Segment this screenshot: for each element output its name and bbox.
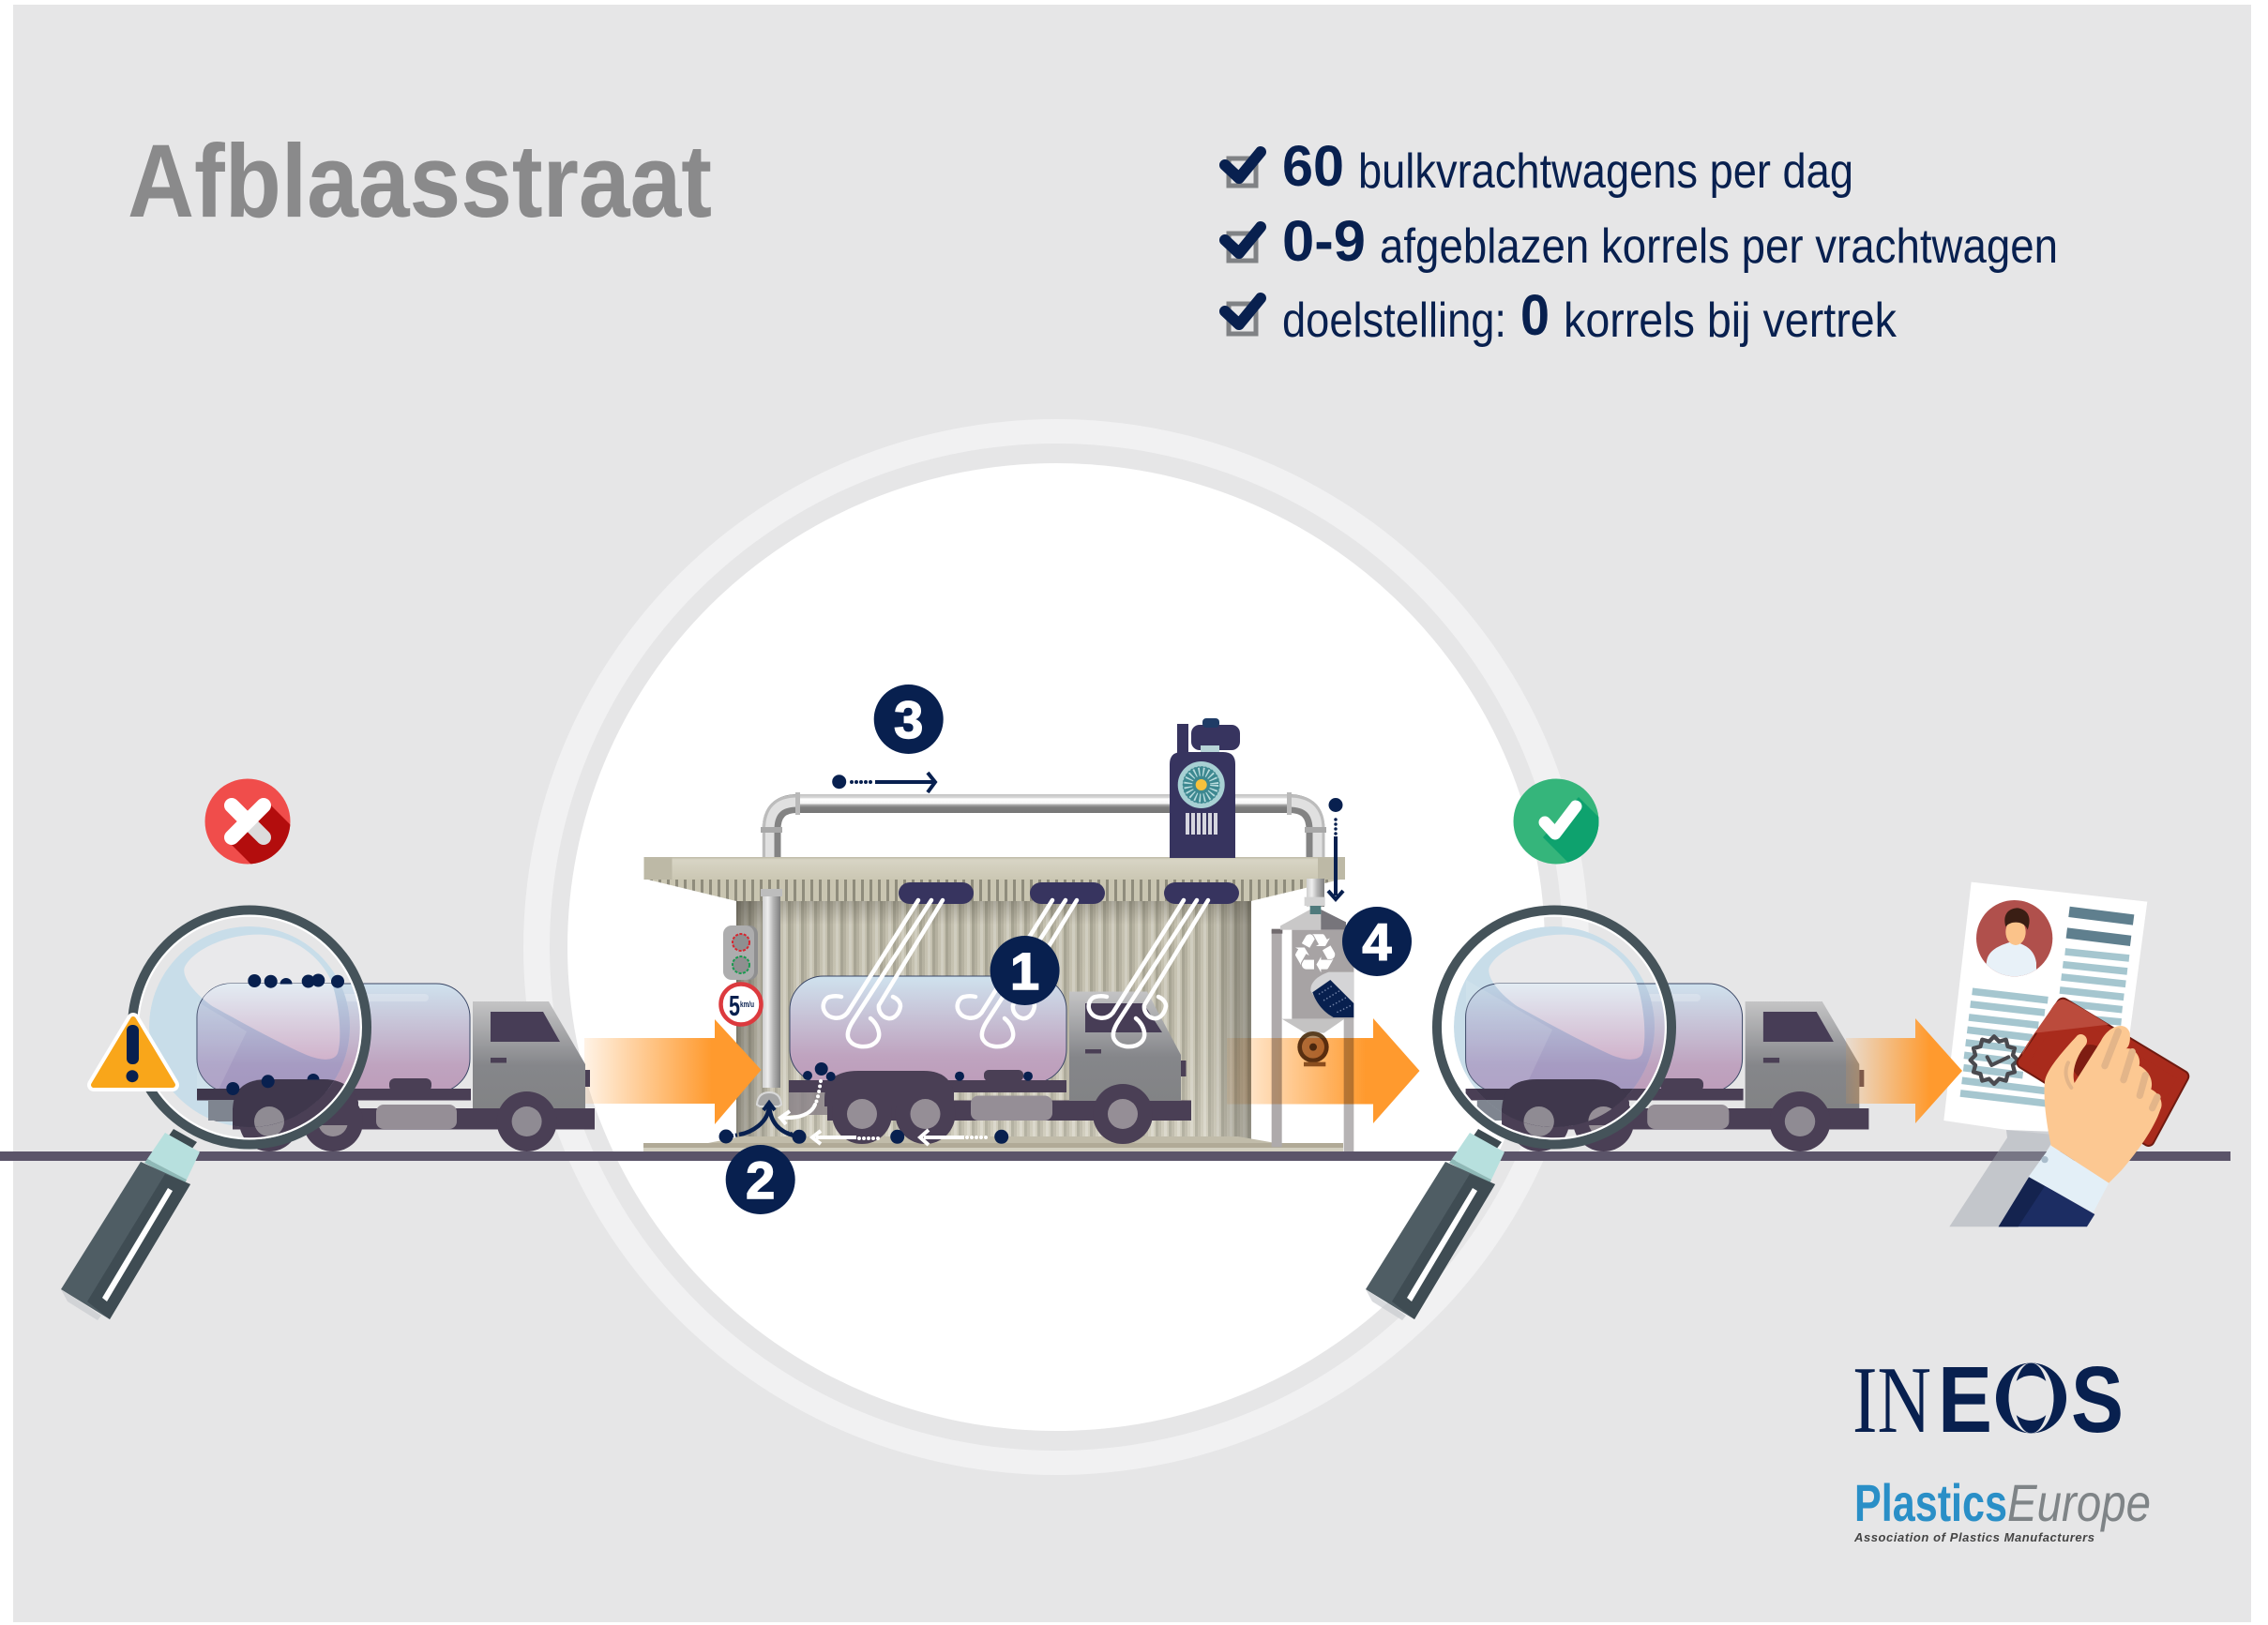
arrow: truck leaves shed bbox=[1227, 1018, 1420, 1123]
checklist row 1: bulkvrachtwagens per dag bbox=[1358, 144, 1853, 199]
speed limit sign bbox=[720, 985, 762, 1024]
magnifier lens bbox=[128, 906, 371, 1150]
hand with cuff and sleeve bbox=[1999, 1026, 2162, 1226]
title: Afblaasstraat bbox=[128, 124, 712, 239]
panel: truck after cleaning under magnifier bbox=[1366, 910, 1868, 1320]
icon: fan unit with motor bbox=[1170, 718, 1240, 858]
magnifier handle bbox=[61, 1129, 200, 1320]
checklist row 1 bbox=[1225, 134, 1853, 199]
traffic light bbox=[723, 925, 758, 980]
logo: PlasticsEurope: Europe bbox=[2007, 1473, 2151, 1532]
INEOS letter O bbox=[1996, 1363, 2066, 1433]
truck before bbox=[197, 984, 595, 1151]
logo: INEOS bbox=[1852, 1347, 2124, 1453]
plastic pellets on truck bbox=[226, 973, 344, 1095]
checklist row 1: 60 bbox=[1282, 134, 1344, 198]
compressed air streams bbox=[824, 900, 1208, 1046]
panel: approved document with stamp bbox=[1943, 882, 2183, 1226]
checklist row 3 bbox=[1225, 283, 1898, 348]
ceiling air nozzles bbox=[899, 882, 1239, 904]
step number 3 bbox=[874, 685, 944, 754]
icon: red cross bbox=[204, 778, 291, 865]
arrow: truck enters shed bbox=[584, 1019, 762, 1124]
checklist row 2 bbox=[1225, 209, 2058, 274]
logo: INEOS: E bbox=[1938, 1347, 1992, 1452]
step number 3: 3 bbox=[894, 690, 923, 749]
logo: PlasticsEurope: Association of Plastics Manufacturers bbox=[1853, 1530, 2094, 1544]
step number 1 bbox=[990, 936, 1060, 1005]
checklist row 3: 0 bbox=[1520, 283, 1550, 347]
panel: blow-off shed bbox=[643, 857, 1345, 1152]
logo: INEOS: IN bbox=[1852, 1347, 1931, 1453]
checklist row 3: doelstelling: bbox=[1282, 293, 1506, 348]
icon: warning triangle bbox=[94, 1019, 173, 1085]
checklist row 2: 0-9 bbox=[1282, 209, 1366, 273]
recycling filter unit bbox=[1272, 897, 1353, 1151]
hand shadow bbox=[1949, 1100, 2052, 1226]
logo: PlasticsEurope bbox=[1853, 1473, 2151, 1544]
document sheet bbox=[1943, 882, 2147, 1132]
shed roof bbox=[643, 857, 1345, 901]
speed limit sign: 5 bbox=[729, 989, 740, 1022]
logo: INEOS: S bbox=[2071, 1347, 2124, 1452]
step number 1: 1 bbox=[1010, 941, 1039, 1001]
document text bars bbox=[1960, 911, 2134, 1104]
panel: truck before cleaning under magnifier bbox=[61, 910, 595, 1320]
road line bbox=[0, 1151, 2230, 1161]
arrow: exhaust down to filter bbox=[1328, 798, 1343, 899]
checklist row 2: afgeblazen korrels per vrachtwagen bbox=[1380, 219, 2058, 274]
icon: green check bbox=[1514, 778, 1598, 865]
step number 4: 4 bbox=[1362, 912, 1392, 971]
red stamp bbox=[2022, 1000, 2183, 1140]
checklist row 3: korrels bij vertrek bbox=[1564, 293, 1898, 348]
checklist of key figures bbox=[1225, 134, 2058, 348]
particle route on floor and suction inlet bbox=[718, 1062, 1033, 1145]
magnifier lens bbox=[1432, 906, 1676, 1150]
magnifier handle bbox=[1366, 1129, 1504, 1320]
shed floor bbox=[643, 1136, 1343, 1152]
truck after bbox=[1466, 984, 1868, 1151]
logo: PlasticsEurope: Plastics bbox=[1854, 1473, 2007, 1532]
panel: central spotlight circle bbox=[523, 419, 1589, 1475]
truck in shed bbox=[789, 976, 1191, 1144]
top extraction pipe bbox=[761, 792, 1326, 907]
speed limit sign: km/u bbox=[740, 1000, 754, 1009]
step number 2 bbox=[726, 1145, 795, 1214]
document portrait bbox=[1976, 900, 2052, 978]
arrow: air direction at step 3 bbox=[832, 773, 935, 792]
drain pipe bbox=[761, 889, 782, 1088]
shed back wall bbox=[736, 895, 1251, 1142]
arrow: truck to certificate bbox=[1846, 1018, 1962, 1123]
step number 2: 2 bbox=[746, 1151, 775, 1210]
icon: recycling symbol: ♻ bbox=[1291, 922, 1339, 986]
quality seal bbox=[1971, 1036, 2018, 1084]
step number 4 bbox=[1342, 907, 1412, 976]
